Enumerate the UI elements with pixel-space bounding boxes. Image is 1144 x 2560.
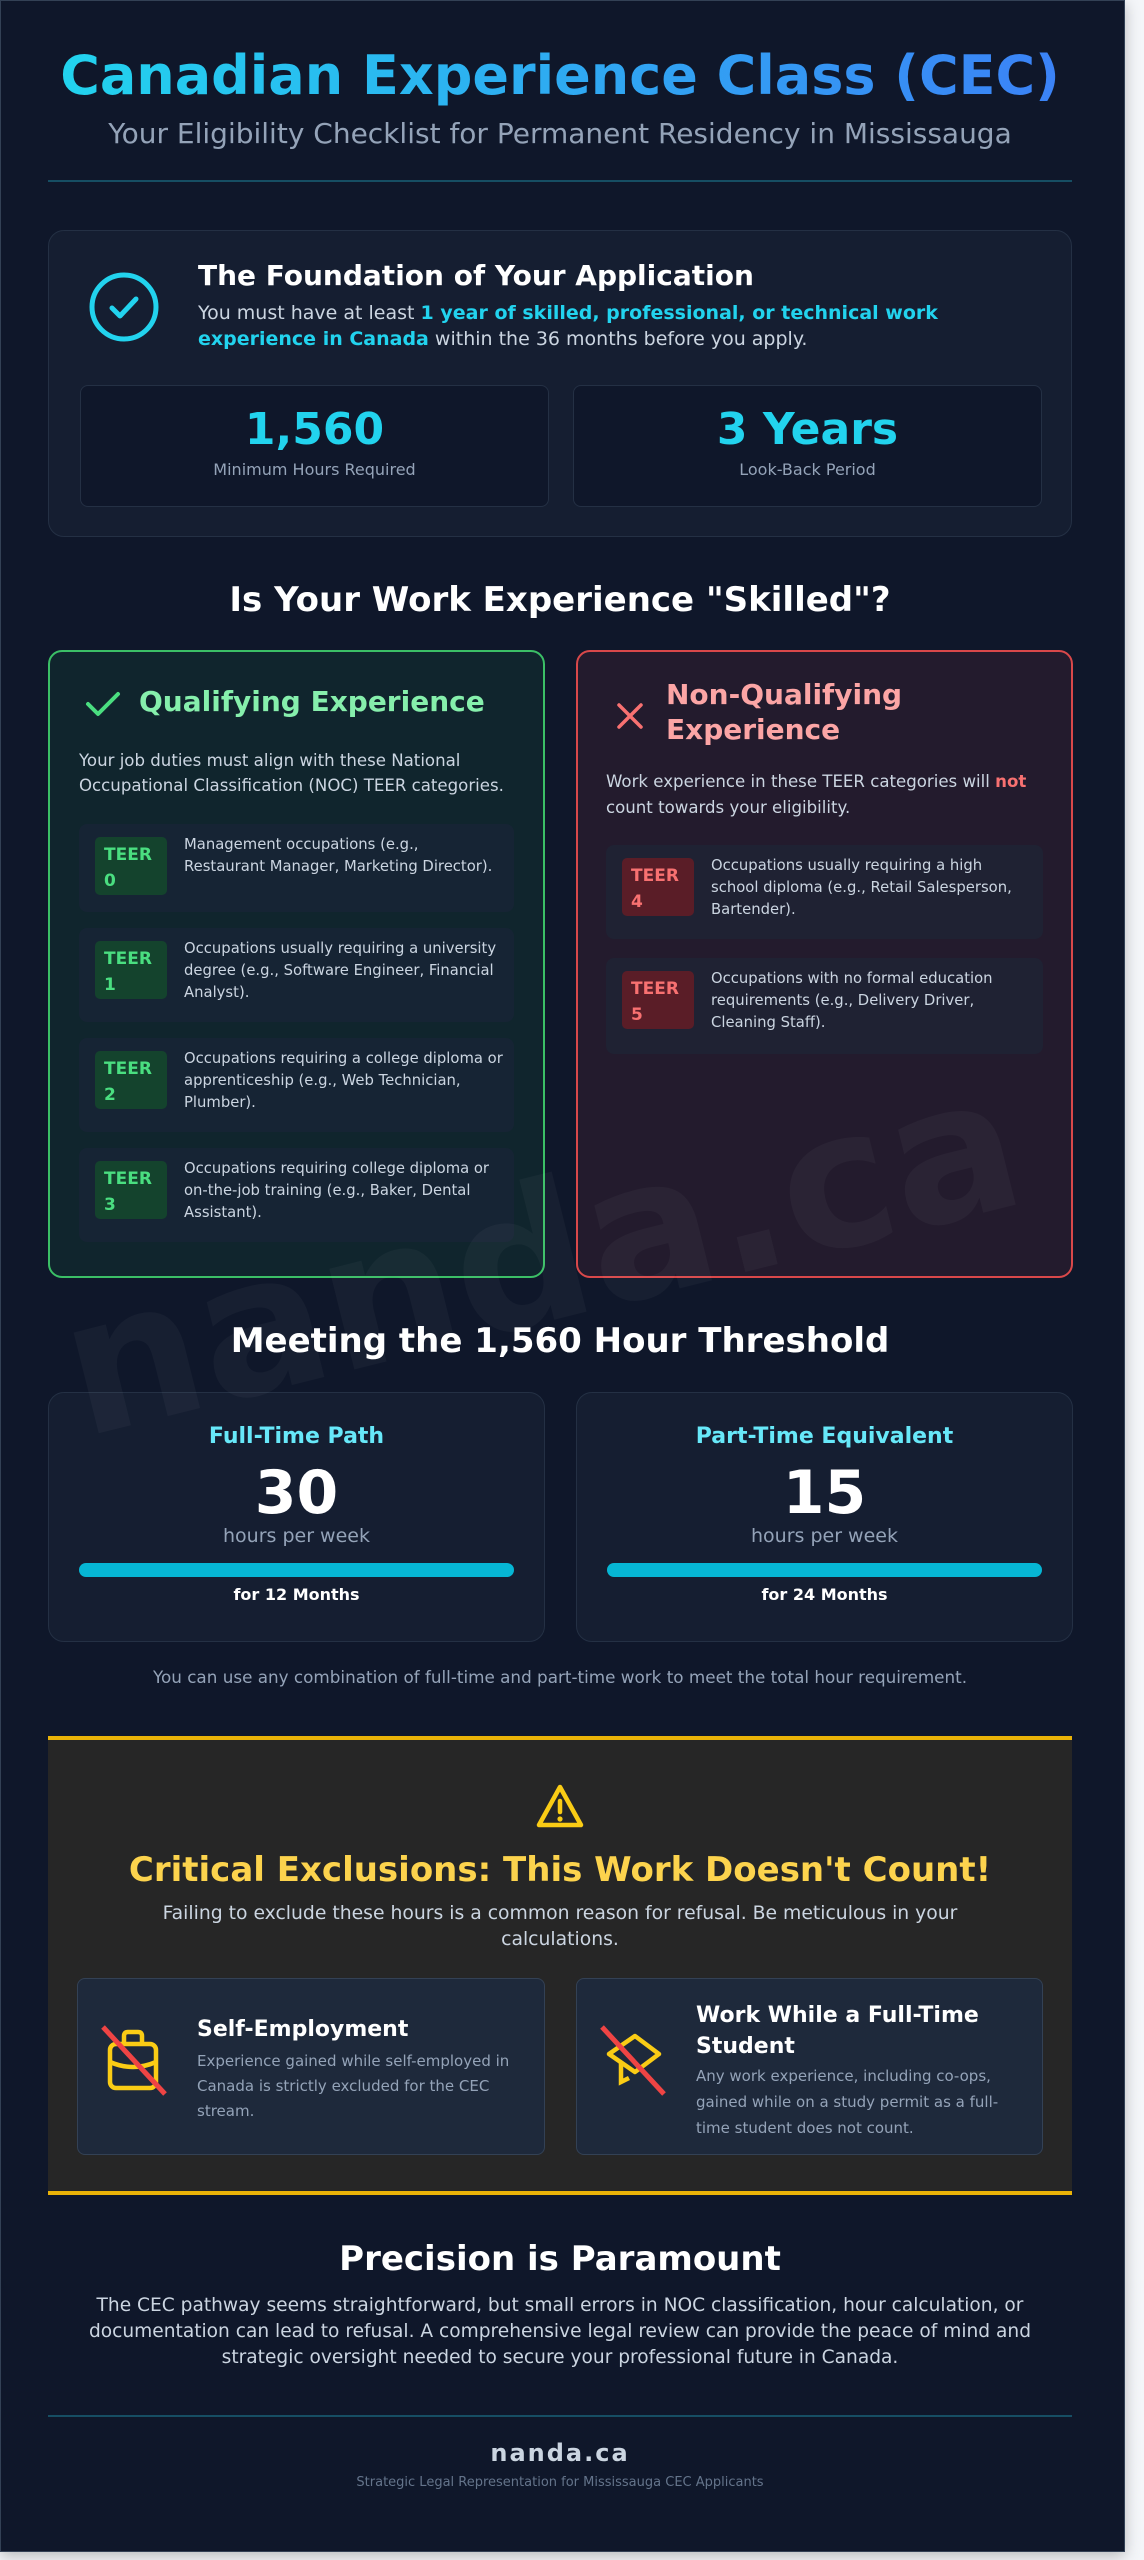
title: Self-Employment [197,2017,408,2042]
icon: warning [536,1784,584,1828]
stat: hours: Minimum Hours Required [213,460,416,479]
text: precision: The CEC pathway seems straightforward, but small errors in NOC classification, hour calculation, or documentation can lead to refusal. A comprehensive legal review can provide the peace of mind and strategic oversight needed to secure your professional future in Canada. [89,2295,1031,2368]
heading: precision: Precision is Paramount [339,2239,781,2279]
row: teer 2: Occupations requiring a college diploma or apprenticeship (e.g., Web Technician, Plumber). [184,1050,503,1111]
icon: check circle [90,272,158,342]
watermark: nanda.ca [41,1030,1041,1481]
row: teer 2 [79,1038,514,1132]
icon: grad cap crossed [600,2025,666,2096]
heading: skilled: Is Your Work Experience "Skilled"? [229,580,891,620]
card: full-time [48,1392,545,1642]
row: teer 3: Occupations requiring college diploma or on-the-job training (e.g., Baker, Dental Assistant). [184,1160,489,1221]
note: You can use any combination of full-time and part-time work to meet the total hour requirement. [153,1667,967,1687]
footer tagline: Strategic Legal Representation for Mississauga CEC Applicants [356,2475,764,2490]
row: teer 1 [79,928,514,1022]
title: Work While a Full-Time [696,2003,979,2028]
card: part-time: 15 [783,1458,866,1528]
stat: hours [80,385,549,507]
card: part-time: hours per week [751,1525,898,1547]
text block: You must have at least 1 year of skilled, professional, or technical work experience in Canada within the 36 months before you apply. [198,302,938,350]
footer brand: nanda.ca [490,2439,630,2467]
heading: The Foundation of Your Application [198,259,754,292]
desc: Any work experience, including co-ops, gained while on a study permit as a full-time student does not count. [696,2067,998,2137]
heading: Non-Qualifying [666,678,902,711]
card: part-time: Part-Time Equivalent [696,1424,953,1449]
row: teer 0 [79,824,514,912]
desc: Experience gained while self-employed in Canada is strictly excluded for the CEC stream. [197,2052,509,2120]
row: teer 5: Occupations with no formal education requirements (e.g., Delivery Driver, Cleaning Staff). [711,970,993,1031]
stat: years [573,385,1042,507]
row: teer 3 [79,1148,514,1242]
panel: non-qualifying [576,650,1073,1278]
row: teer 5 [606,958,1043,1054]
title: Canadian Experience Class (CEC) [60,44,1060,107]
stat: years: Look-Back Period [739,460,876,479]
row: teer 4: TEER [631,866,679,886]
row: teer 5: 5 [631,1005,643,1025]
row: teer 3: 3 [104,1195,116,1215]
bar [79,1563,514,1577]
card: full-time: Full-Time Path [209,1424,384,1449]
panel: qualifying [48,650,545,1278]
title [696,2003,979,2059]
heading [666,678,902,746]
heading: Experience [666,713,840,746]
heading: Qualifying Experience [139,685,485,718]
stat: years: 3 Years [717,404,898,455]
card: student [576,1978,1043,2155]
row: teer 2: 2 [104,1085,116,1105]
icon: briefcase crossed [101,2025,167,2096]
subtitle: Your Eligibility Checklist for Permanent Residency in Mississauga [108,117,1012,150]
row: teer 0: TEER [104,845,152,865]
row: teer 1: TEER [104,949,152,969]
bar [607,1563,1042,1577]
row: teer 0: Management occupations (e.g., Restaurant Manager, Marketing Director). [184,836,492,875]
row: teer 1: Occupations usually requiring a university degree (e.g., Software Engineer, Financial Analyst). [184,940,496,1001]
row: teer 0: 0 [104,871,116,891]
panel: foundation [48,230,1072,537]
stat: hours: 1,560 [245,404,384,455]
card: full-time: 30 [255,1458,338,1528]
text: Failing to exclude these hours is a common reason for refusal. Be meticulous in your calculations. [163,1903,957,1950]
card: part-time: for 24 Months [761,1585,888,1604]
title: Student [696,2034,795,2059]
row: teer 2: TEER [104,1059,152,1079]
row: teer 4: Occupations usually requiring a high school diploma (e.g., Retail Salesperson, Bartender). [711,857,1012,918]
card: full-time: hours per week [223,1525,370,1547]
icon: x [617,703,643,729]
card: full-time: for 12 Months [233,1585,360,1604]
card: self-employment [77,1978,545,2155]
heading: Critical Exclusions: This Work Doesn't Count! [129,1850,991,1890]
card: part-time [576,1392,1073,1642]
panel: exclusions [48,1736,1072,2195]
row: teer 3: TEER [104,1169,152,1189]
text: Work experience in these TEER categories will not count towards your eligibility. [606,772,1026,817]
row: teer 1: 1 [104,975,116,995]
row: teer 4: 4 [631,892,643,912]
icon: check [86,692,120,716]
row: teer 4 [606,845,1043,939]
row: teer 5: TEER [631,979,679,999]
heading: threshold: Meeting the 1,560 Hour Threshold [231,1321,889,1361]
text: Your job duties must align with these National Occupational Classification (NOC) TEER categories. [79,751,504,795]
